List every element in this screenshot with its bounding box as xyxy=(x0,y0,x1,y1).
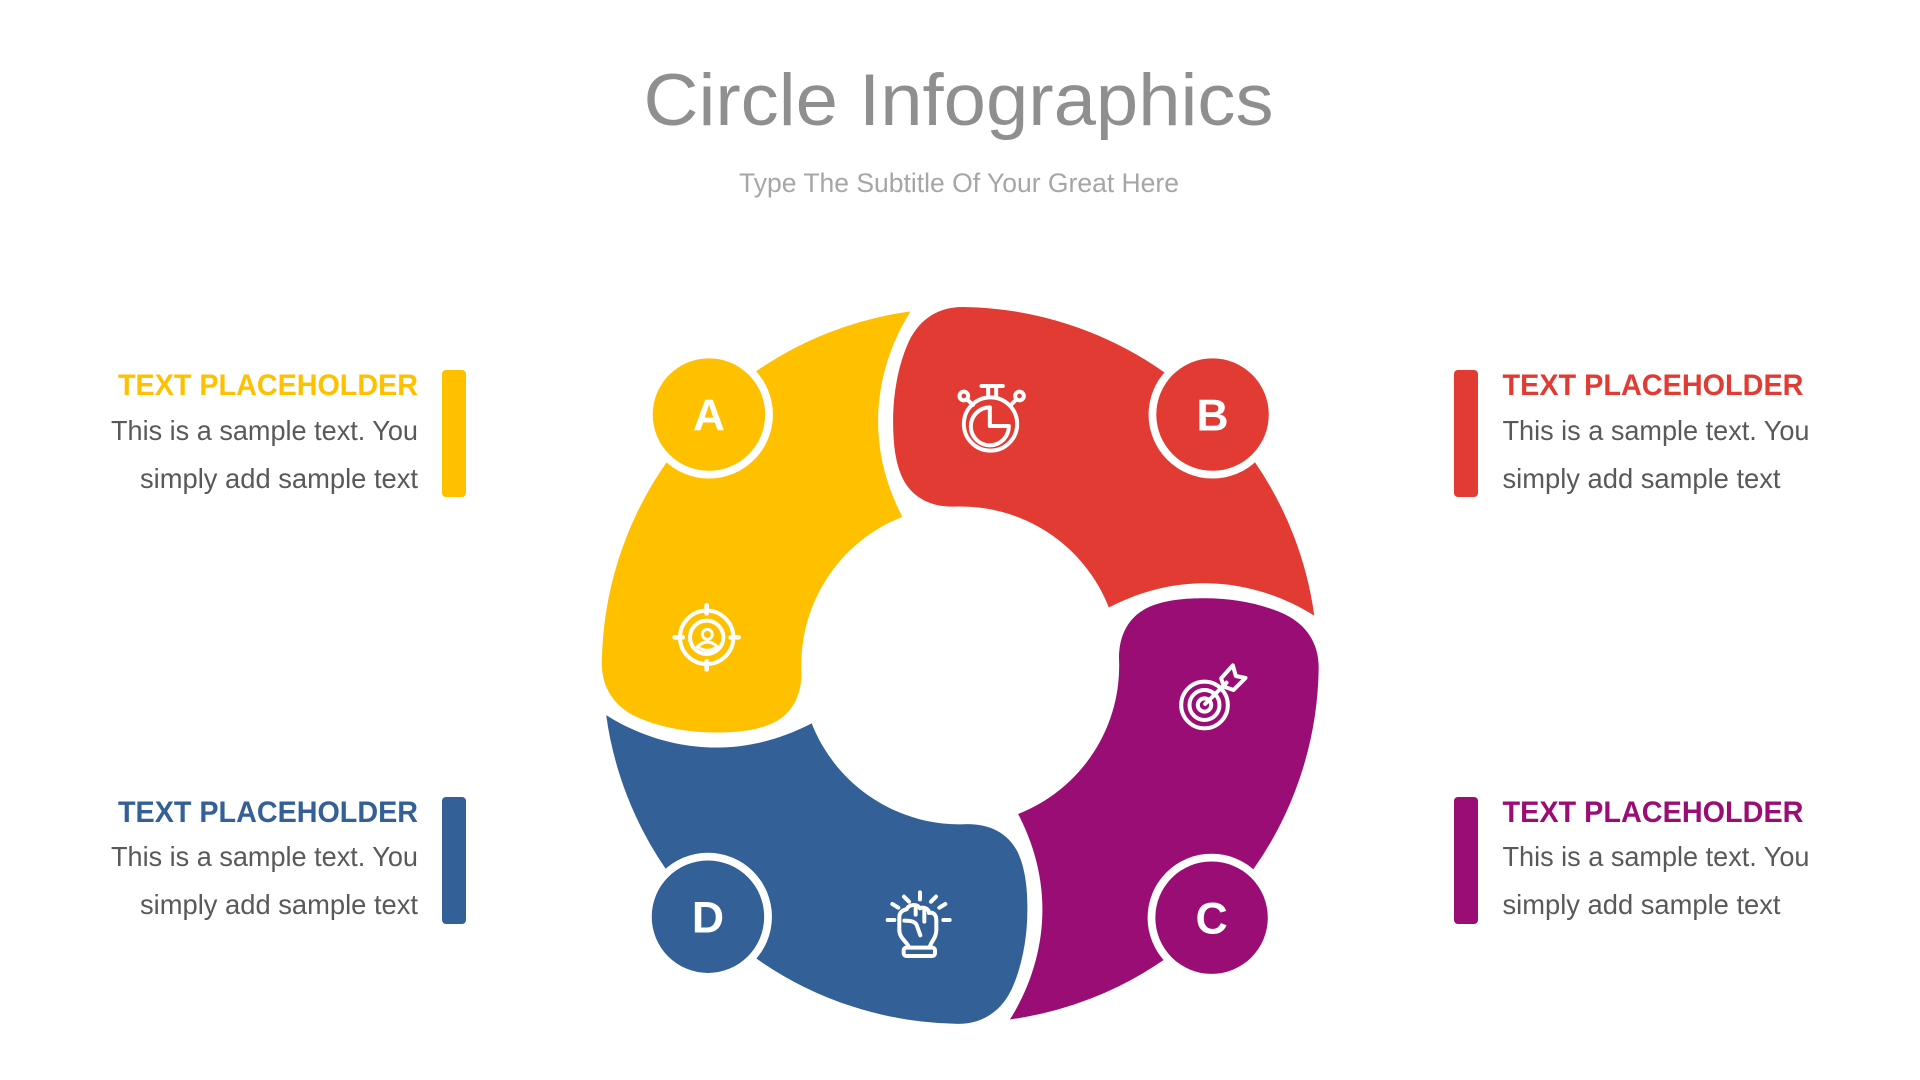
badge A xyxy=(645,351,773,479)
panel: text block C xyxy=(1454,796,1810,924)
body A line 1: This is a sample text. You xyxy=(111,415,418,446)
heading B: TEXT PLACEHOLDER xyxy=(1502,369,1804,402)
body A line 2: simply add sample text xyxy=(140,463,418,494)
body C line 2: simply add sample text xyxy=(1502,889,1781,920)
heading D: TEXT PLACEHOLDER xyxy=(118,796,418,829)
accent bar D xyxy=(442,797,466,924)
panel: text block D xyxy=(111,796,466,924)
circular diagram xyxy=(602,307,1319,1024)
heading C: TEXT PLACEHOLDER xyxy=(1502,796,1804,829)
accent bar B xyxy=(1454,370,1478,497)
title: Circle Infographics xyxy=(644,60,1274,141)
subtitle: Type The Subtitle Of Your Great Here xyxy=(739,168,1179,198)
panel: text block B xyxy=(1454,369,1810,497)
accent bar A xyxy=(442,370,466,497)
icon: arrow target xyxy=(1181,665,1245,728)
segment B xyxy=(893,307,1314,616)
badge D xyxy=(644,853,772,981)
icon: raised fist xyxy=(888,892,950,956)
badge C: C xyxy=(1195,895,1228,944)
badge D: D xyxy=(692,894,724,943)
panel: text block A xyxy=(111,369,466,497)
badge A: A xyxy=(693,392,725,441)
accent bar C xyxy=(1454,797,1478,924)
body B line 1: This is a sample text. You xyxy=(1502,415,1810,446)
heading A: TEXT PLACEHOLDER xyxy=(118,369,418,402)
body B line 2: simply add sample text xyxy=(1502,463,1781,494)
badge B xyxy=(1149,351,1277,479)
body D line 2: simply add sample text xyxy=(140,889,418,920)
body C line 1: This is a sample text. You xyxy=(1502,841,1810,872)
badge B: B xyxy=(1196,392,1229,441)
segment C xyxy=(1010,598,1319,1019)
segment D xyxy=(606,715,1027,1024)
body D line 1: This is a sample text. You xyxy=(111,841,418,872)
icon: stopwatch xyxy=(959,386,1024,451)
segment A xyxy=(602,311,911,733)
badge C xyxy=(1148,854,1276,982)
icon: person target xyxy=(675,605,739,669)
